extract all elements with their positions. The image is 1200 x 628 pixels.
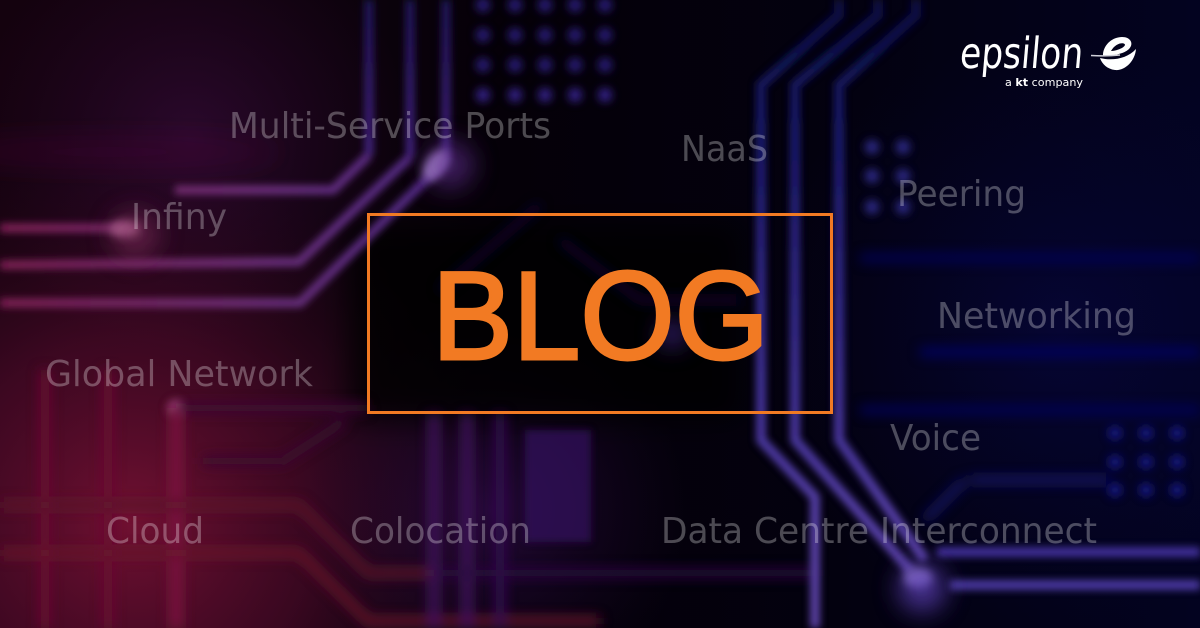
- circuit traces: right: [761, 0, 1200, 628]
- keyword: Networking: Networking: [937, 296, 1136, 337]
- keyword: Peering: Peering: [897, 174, 1026, 215]
- keyword: Voice: Voice: [890, 418, 981, 459]
- circuit traces: lower left: [0, 370, 815, 628]
- dark area behind frame: [350, 225, 740, 420]
- circuit traces: upper left: [0, 0, 446, 303]
- title: BLOG: BLOG: [432, 247, 769, 386]
- keyword: Data Centre Interconnect: Data Centre Interconnect: [661, 511, 1097, 552]
- circuit nodes: left and top: [110, 145, 454, 416]
- keyword: Global Network: Global Network: [45, 354, 313, 395]
- orange frame: [368, 214, 832, 412]
- keyword: Cloud: Cloud: [106, 511, 204, 552]
- dot grids: [476, 0, 1184, 497]
- logo: epsilon a kt company: epsilon: [958, 29, 1085, 79]
- icon: epsilon swoosh: [1091, 37, 1136, 70]
- haze band: upper left: [0, 142, 280, 162]
- keyword: Colocation: Colocation: [350, 511, 531, 552]
- keyword: Multi-Service Ports: Multi-Service Ports: [229, 106, 551, 147]
- logo: epsilon a kt company: a kt company: [1005, 76, 1083, 89]
- keyword: Infiny: Infiny: [131, 197, 227, 238]
- keyword: NaaS: NaaS: [681, 129, 768, 170]
